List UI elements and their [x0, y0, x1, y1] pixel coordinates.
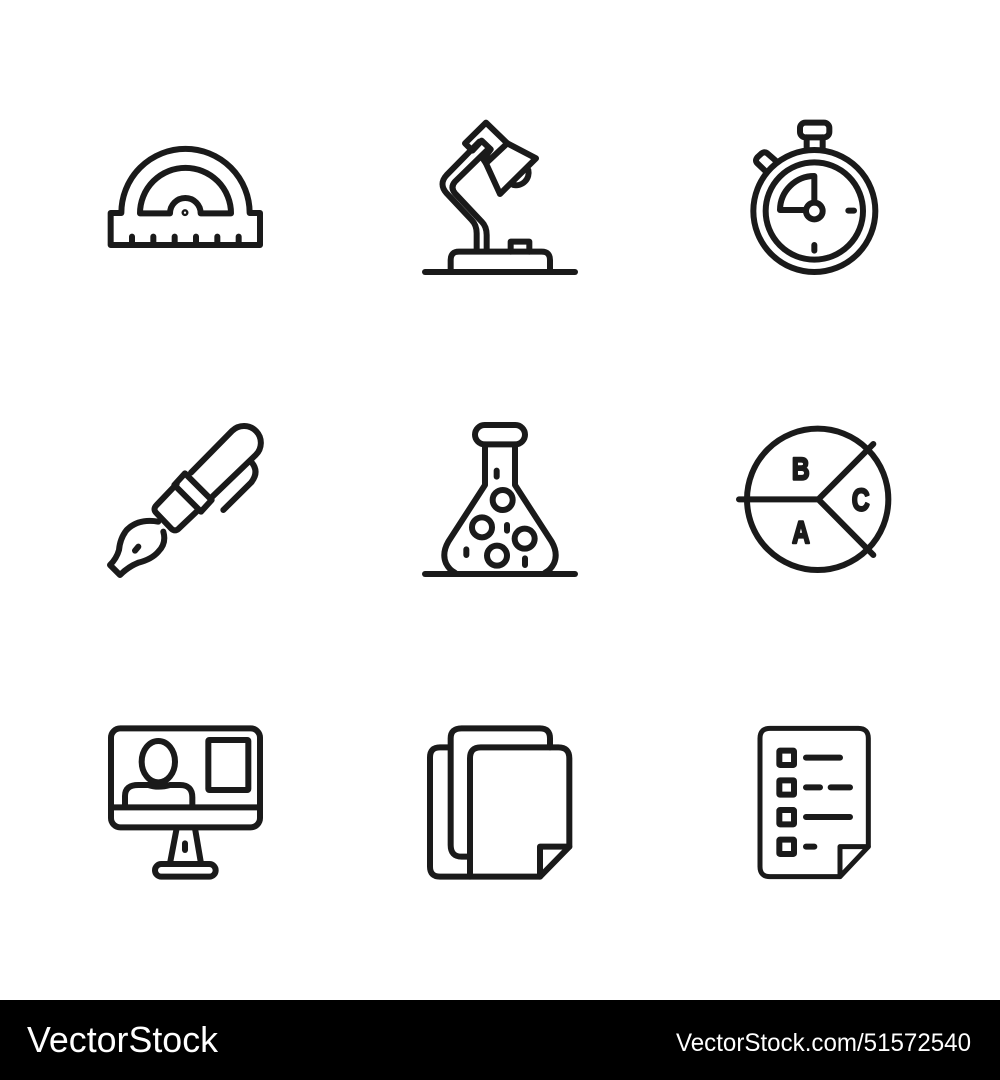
pie labels: A: [792, 515, 810, 550]
footer brand: VectorStock: [27, 1019, 219, 1060]
icon: stopwatch: [753, 123, 875, 272]
icon: protractor: [111, 149, 260, 245]
icon: chemistry flask: [425, 425, 575, 574]
icon: stacked documents: [430, 728, 569, 877]
icon: desk lamp: [425, 123, 575, 272]
pie labels: C: [852, 483, 870, 517]
pie labels: [792, 452, 870, 550]
icon: pie chart A B C: [739, 429, 888, 570]
icon: fountain pen: [110, 426, 261, 575]
icon: checklist: [760, 728, 868, 877]
footer bar: [0, 1000, 1000, 1080]
pie labels: B: [792, 452, 810, 486]
footer image id: VectorStock.com/51572540: [676, 1029, 971, 1057]
icon: monitor with person: [111, 728, 260, 877]
